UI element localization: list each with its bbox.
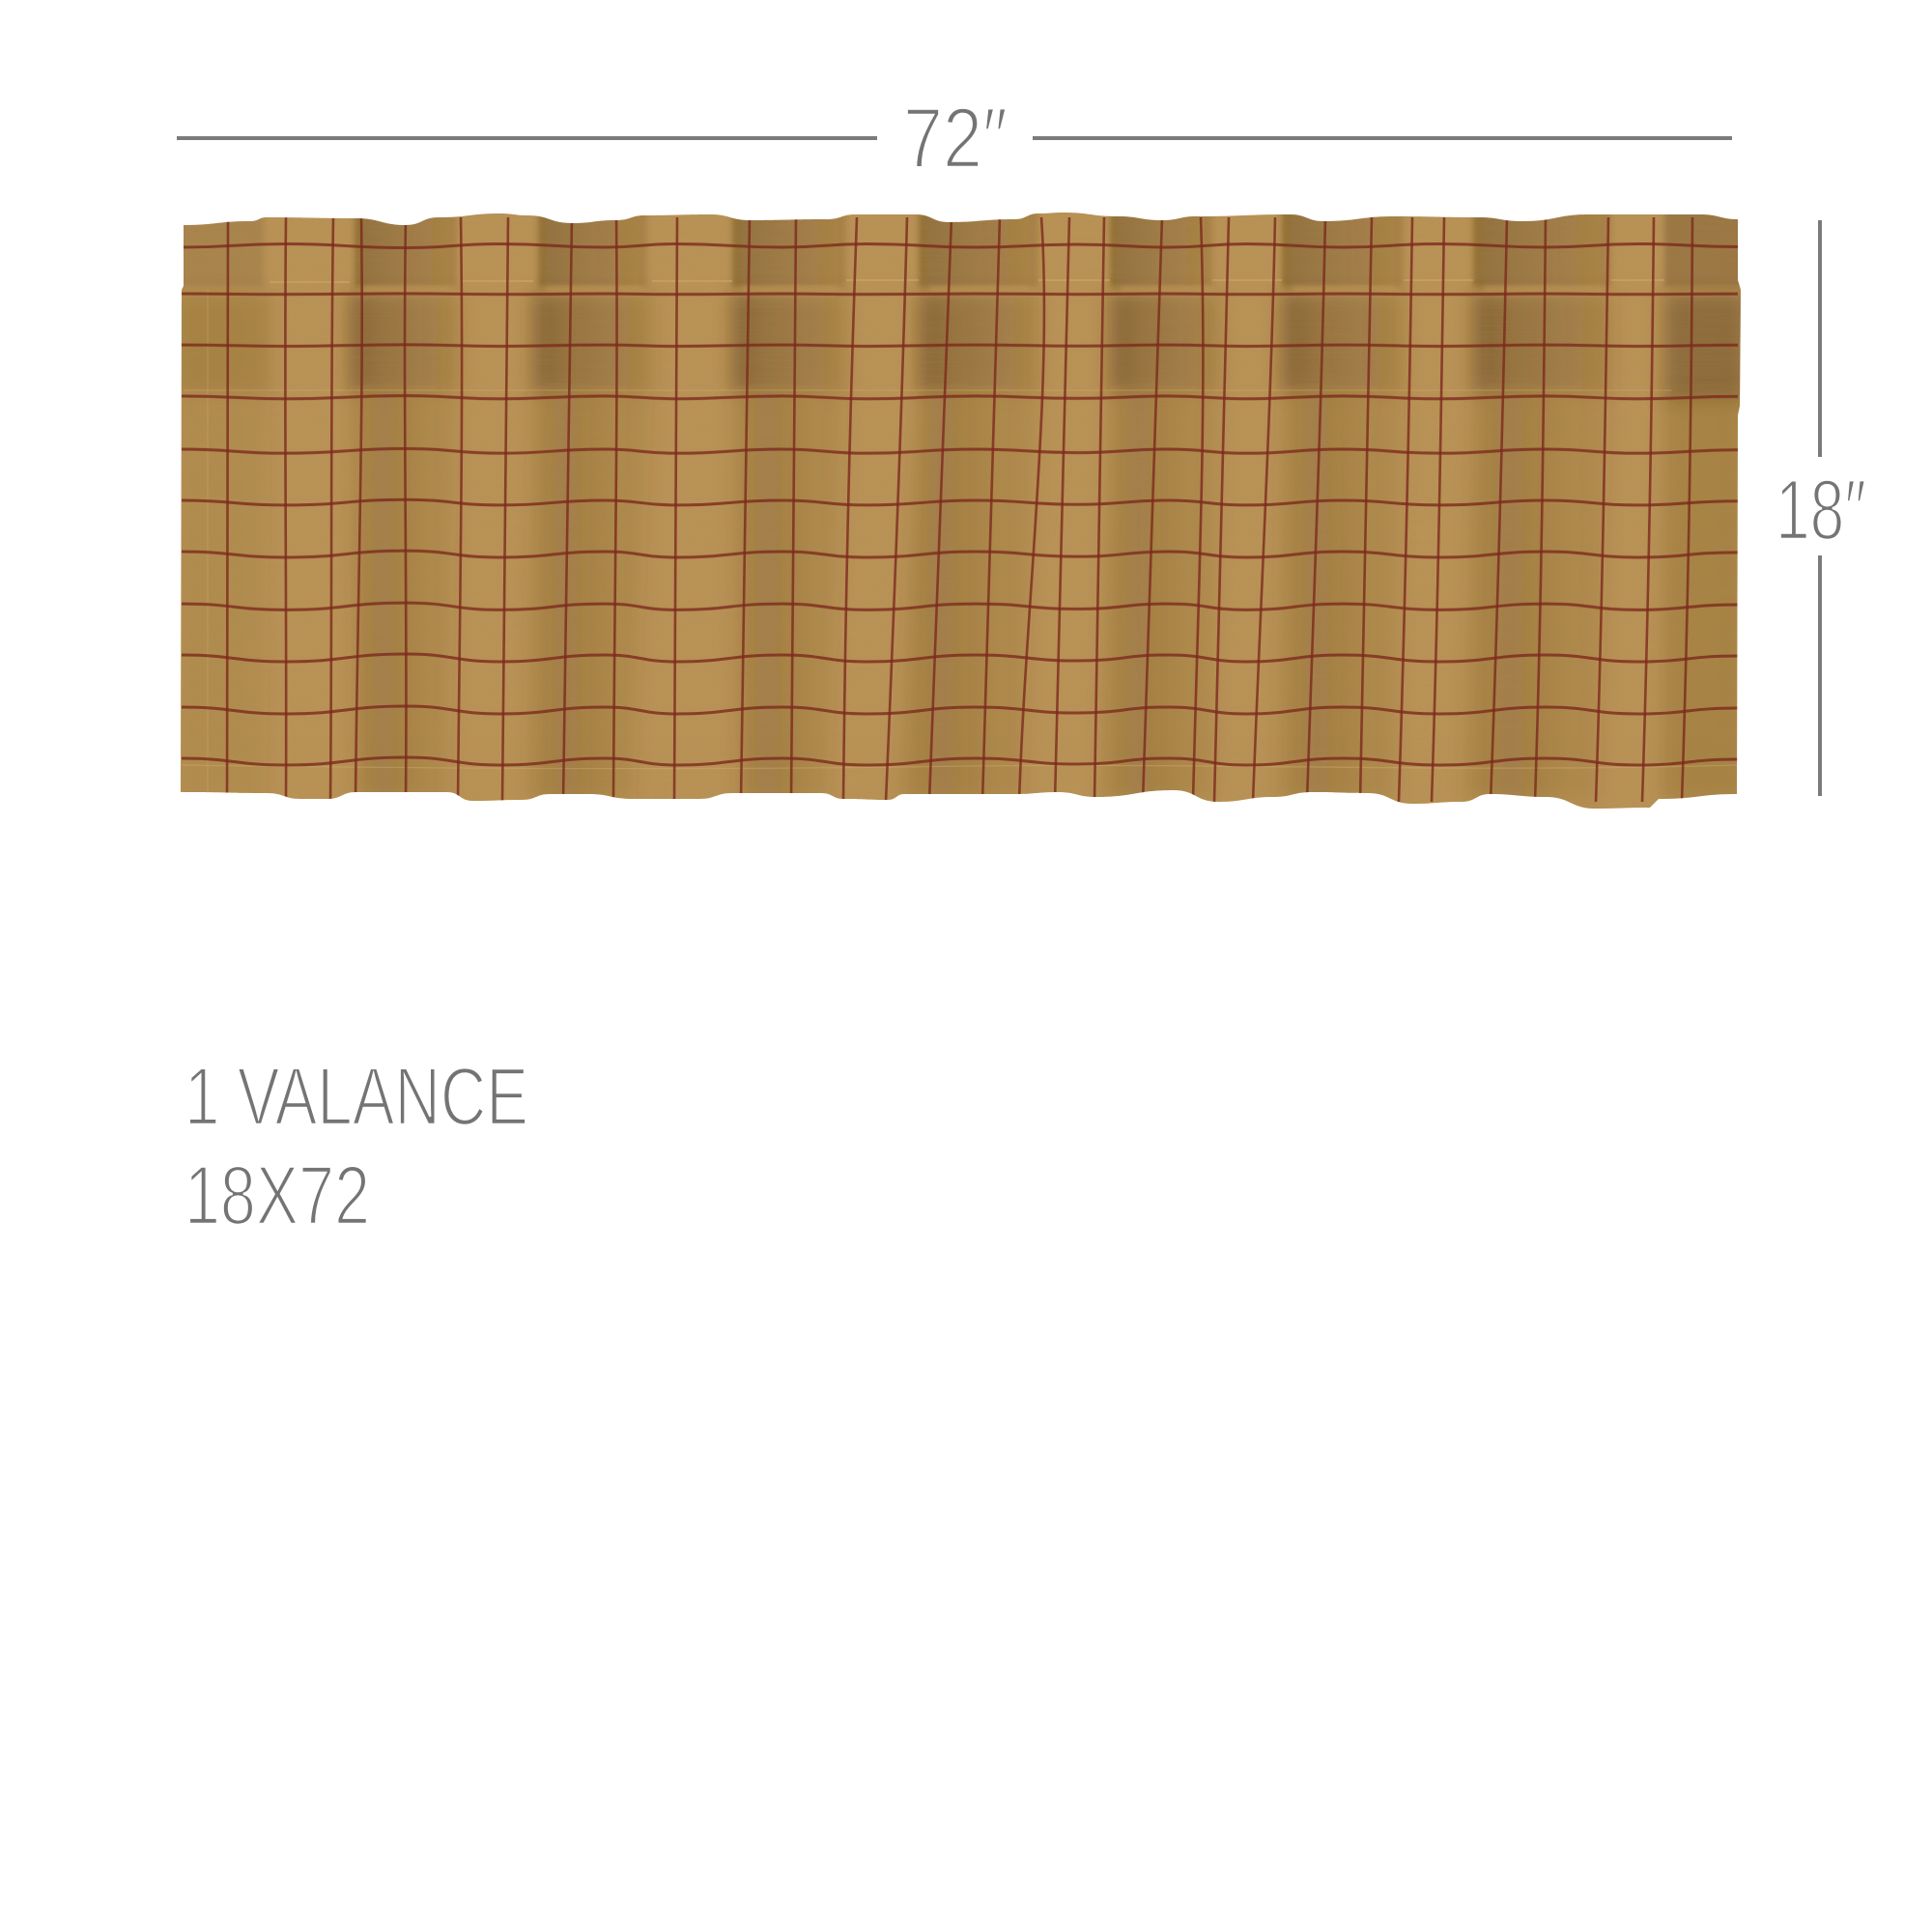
plaid horizontal stripes [182,243,1738,765]
product description text [185,1051,528,1242]
plaid vertical stripes [227,217,1692,802]
label: 1 valance: 1 VALANCE [185,1051,528,1142]
width dimension: 72 inches [177,90,1732,185]
label: size 18x72: 18X72 [185,1150,370,1242]
woven texture [174,208,1748,816]
pleat lip highlights [363,286,1604,293]
fabric panel shading [174,208,1747,802]
stitching seams [182,280,1739,792]
height dimension: 18 inches [1776,220,1866,796]
valance curtain photo [174,208,1748,816]
width dimension: 72 inches: 72″ [903,90,1008,185]
height dimension: 18 inches: 18″ [1776,462,1866,557]
